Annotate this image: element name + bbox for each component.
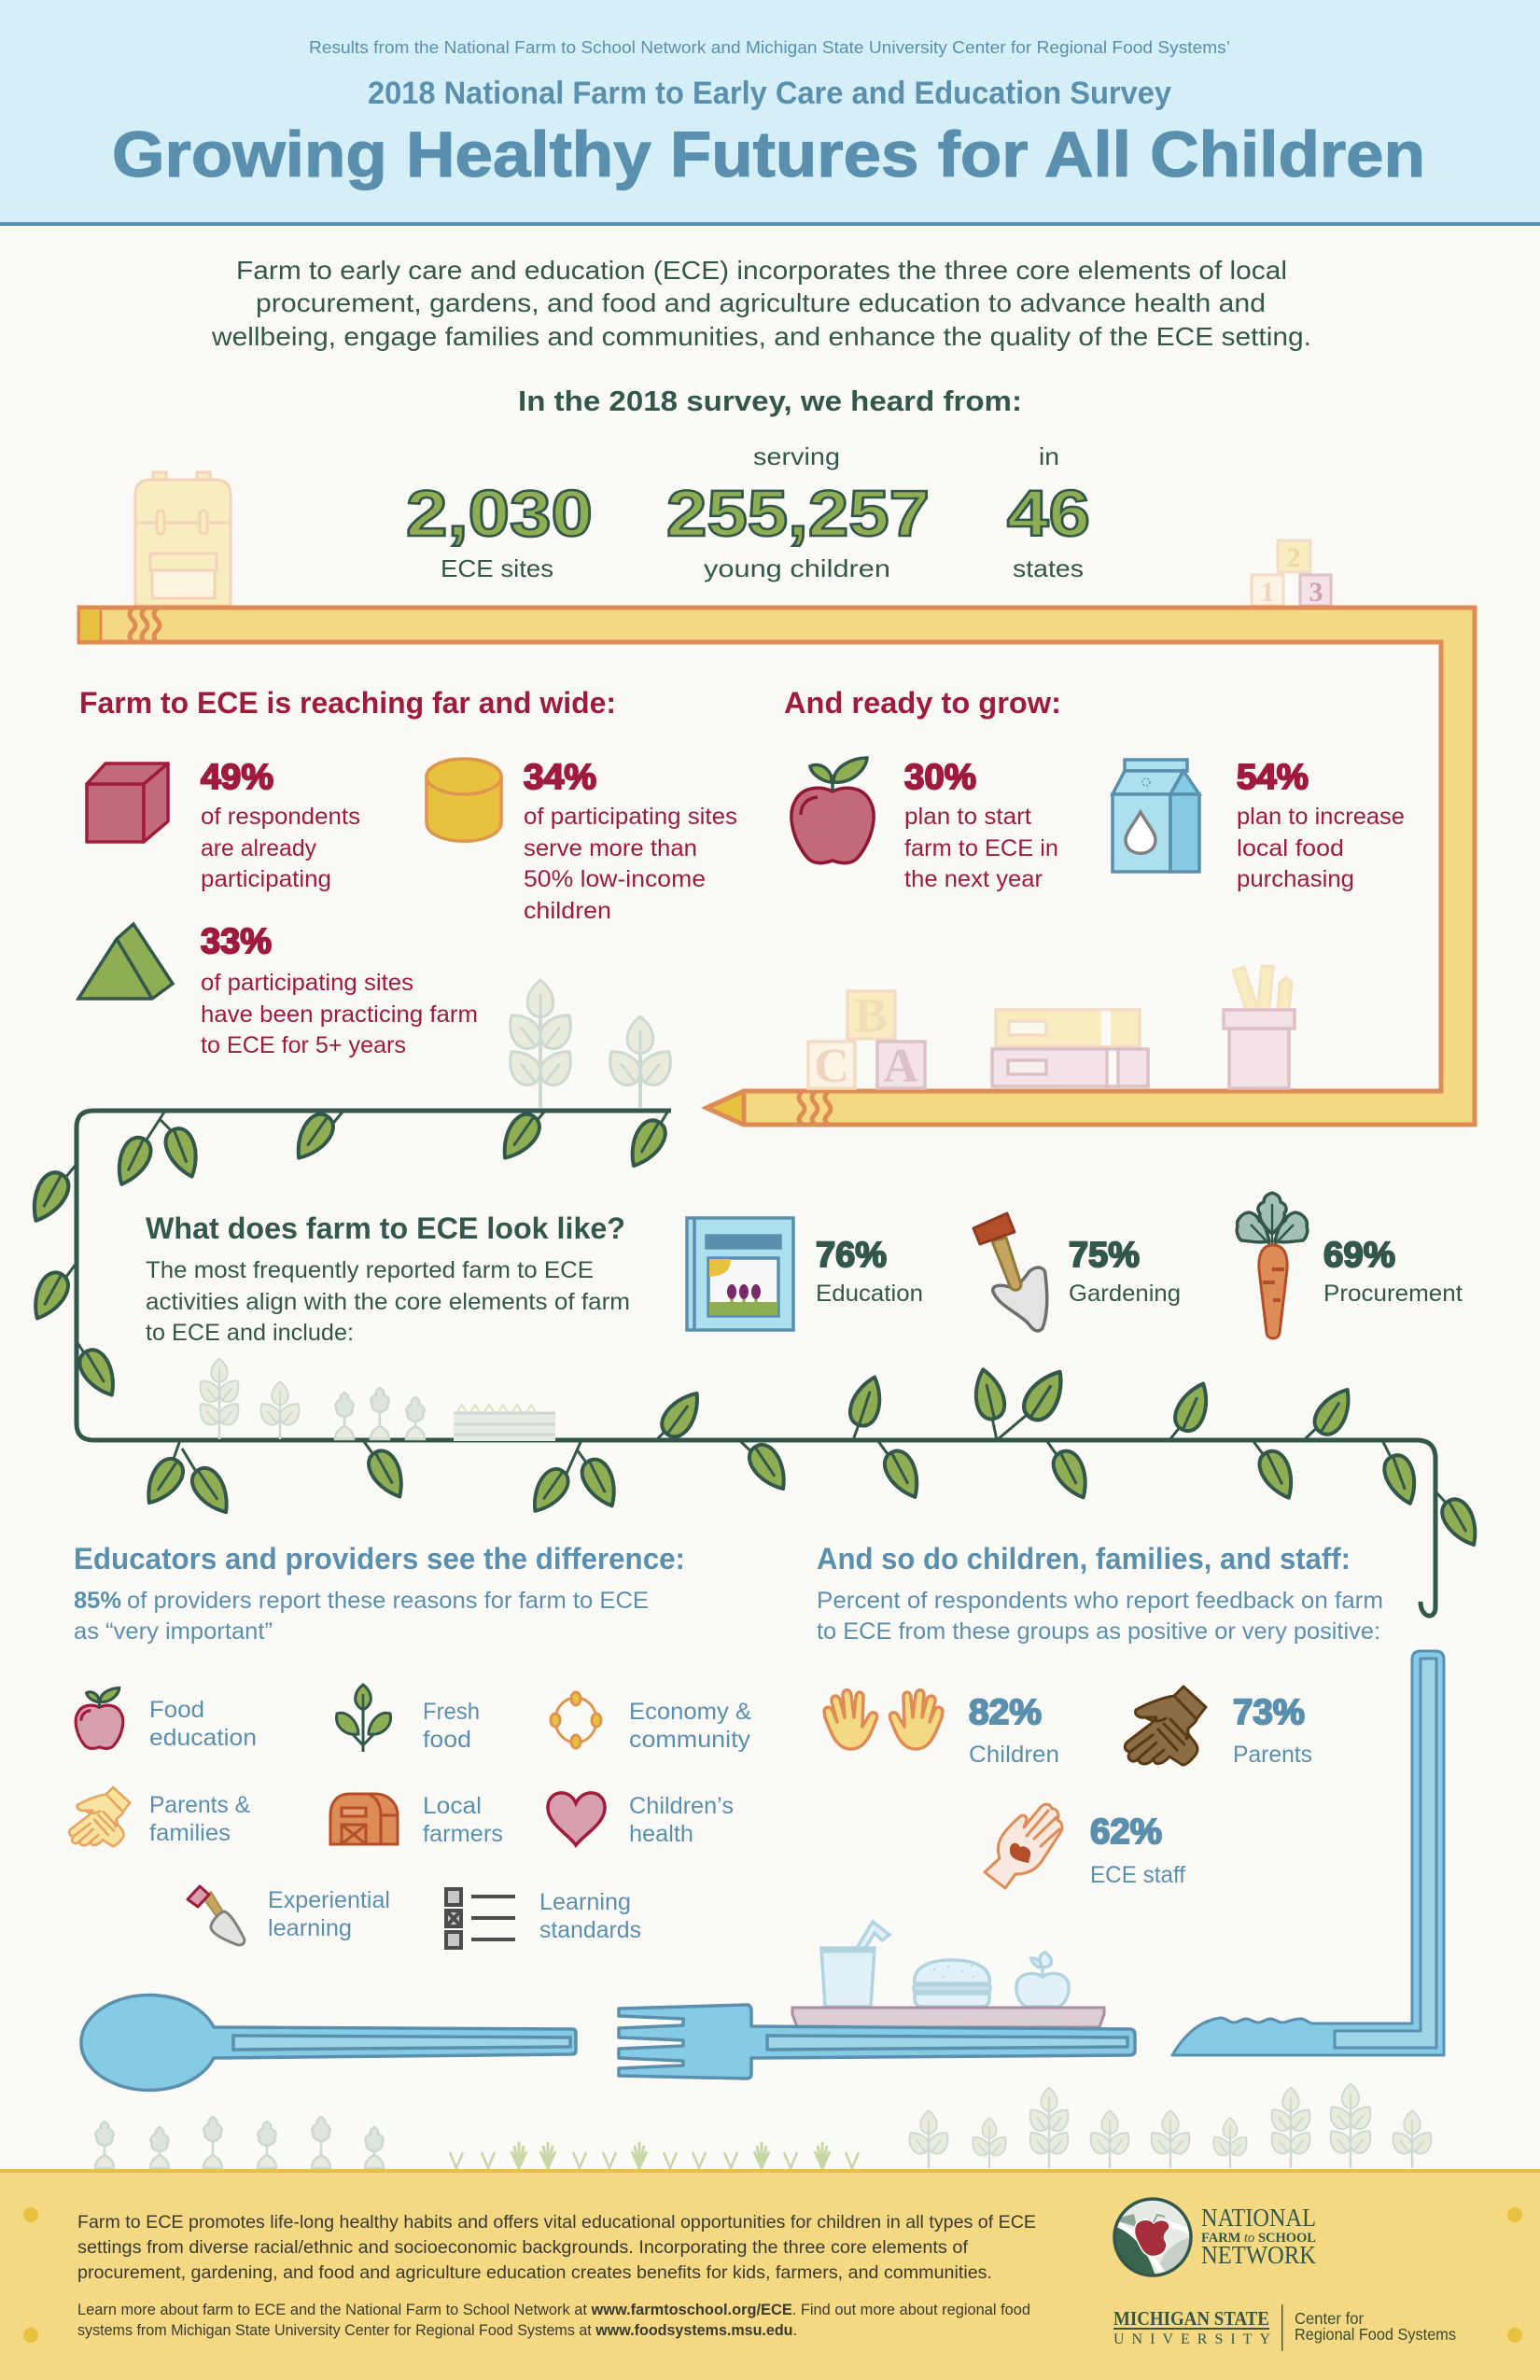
reason: children's health	[548, 1793, 734, 1847]
icon: clasped hands	[69, 1787, 130, 1846]
reason: children's health: Children’s	[629, 1793, 734, 1819]
faded classroom objects on pencil	[808, 966, 1295, 1093]
reason: food education: education	[149, 1725, 257, 1751]
vine stems	[58, 1111, 1456, 1514]
logo: National Farm to School Network: NATIONAL	[1201, 2204, 1316, 2232]
item: 49 percent: 49%	[201, 758, 273, 797]
item: 34 percent: children	[524, 898, 611, 924]
icon: spoon	[81, 1995, 576, 2091]
footer summary text: procurement, gardening, and food and agriculture education creates benefits for kids, farmers, and communities.	[77, 2263, 992, 2283]
faded garden row	[95, 2084, 1437, 2168]
icon: number blocks: 2	[1286, 542, 1301, 573]
reason: local farmers: Local	[423, 1793, 482, 1819]
arrow: pencil path	[79, 608, 1475, 1125]
icon: letter blocks	[808, 989, 925, 1093]
feedback: ECE staff: ECE staff	[1090, 1862, 1185, 1888]
icon: brown clasped hands	[1125, 1687, 1206, 1765]
stat: ECE sites: ECE sites	[441, 554, 553, 582]
description	[817, 1588, 1383, 1645]
reason: local farmers: farmers	[423, 1821, 503, 1847]
description	[146, 1257, 630, 1346]
description: to ECE from these groups as positive or very positive:	[817, 1618, 1380, 1645]
icon: fork	[619, 2005, 1135, 2079]
reason: parents and families: families	[149, 1820, 231, 1846]
stat: states: in	[1039, 442, 1059, 470]
reason: learning standards	[446, 1889, 641, 1948]
footer panel	[0, 2169, 1540, 2380]
feedback: children	[824, 1690, 1059, 1768]
intro paragraph: Farm to early care and education (ECE) incorporates the three core elements of local	[236, 256, 1287, 285]
icon: knife	[1172, 1651, 1444, 2055]
icon: community ring	[551, 1692, 601, 1748]
stat: states	[1007, 442, 1090, 582]
icon: letter blocks: C	[814, 1040, 849, 1093]
header kicker: Results from the National Farm to School Network and Michigan State University Center for Regional Food Systems’	[309, 37, 1230, 57]
logo: Michigan State University: Center for	[1295, 2309, 1364, 2328]
item: 49 percent: participating	[201, 866, 331, 892]
icon: stacked books	[992, 1010, 1148, 1086]
logo: National Farm to School Network	[1111, 2195, 1316, 2282]
vine with leaves	[23, 1109, 1486, 1616]
reason: parents and families	[69, 1787, 250, 1846]
faded plants on upper vine	[501, 980, 679, 1108]
icon: small apple	[76, 1688, 123, 1748]
icon: trowel	[973, 1213, 1047, 1331]
description: of providers report these reasons for farm to ECE	[127, 1588, 649, 1614]
footer summary text	[77, 2213, 1036, 2283]
stat: young children: 255,257	[666, 477, 930, 550]
reason: fresh food	[337, 1685, 480, 1753]
reason: learning standards: Learning	[539, 1889, 631, 1915]
feedback: children: Children	[969, 1742, 1059, 1768]
icon: milk carton	[1113, 760, 1199, 872]
footer summary text: Farm to ECE promotes life-long healthy habits and offers vital educational opportunities for children in all types of ECE	[77, 2213, 1036, 2233]
stat: young children: serving	[753, 442, 840, 470]
leafy plants	[903, 2084, 1437, 2168]
panel: children families and staff	[817, 1542, 1383, 1888]
item: 54 percent	[1113, 758, 1405, 892]
icon: green tent	[78, 924, 173, 999]
description: The most frequently reported farm to ECE	[146, 1257, 594, 1283]
icon: hand with heart	[985, 1804, 1062, 1888]
panel: what does farm to ECE look like	[146, 1193, 1463, 1346]
description: activities align with the core elements of farm	[146, 1289, 630, 1315]
item: 34 percent: of participating sites	[524, 804, 737, 830]
item: 34 percent: serve more than	[524, 835, 697, 861]
icon: raised hands	[824, 1690, 943, 1749]
item: 34 percent	[427, 758, 737, 924]
item: 30 percent: 30%	[904, 758, 976, 797]
footer links text	[77, 2302, 1030, 2339]
footer links text: Learn more about farm to ECE and the National Farm to School Network at www.farmtoschool.org/ECE. Find out more about regional food	[77, 2302, 1030, 2318]
header banner	[0, 0, 1540, 226]
reason: parents and families: Parents &	[149, 1792, 250, 1818]
logo: Michigan State University: UNIVERSITY	[1113, 2331, 1270, 2347]
item: education: Education	[816, 1281, 923, 1307]
footer summary text: settings from diverse racial/ethnic and socioeconomic backgrounds. Incorporating the three core elements of	[77, 2238, 969, 2258]
item: 54 percent: purchasing	[1237, 866, 1354, 892]
item: 33 percent: have been practicing farm	[201, 1001, 478, 1028]
reason: food education: Food	[149, 1697, 204, 1723]
reason: learning standards: standards	[539, 1917, 641, 1943]
icon: barn	[330, 1794, 398, 1844]
intro paragraph: wellbeing, engage families and communities, and enhance the quality of the ECE setting.	[211, 322, 1311, 351]
item: 54 percent: 54%	[1237, 758, 1309, 797]
logo: Michigan State University	[1113, 2304, 1456, 2351]
item: gardening: Gardening	[1069, 1281, 1181, 1307]
feedback: ECE staff: 62%	[1090, 1813, 1162, 1852]
panel: educators and providers	[69, 1542, 751, 1948]
item: education: 76%	[816, 1236, 887, 1275]
icon: faded apple	[1016, 1953, 1069, 2007]
reason: economy and community	[551, 1692, 751, 1753]
reason: local farmers	[330, 1793, 503, 1847]
panel: reaching far and wide	[78, 686, 737, 1058]
stat: ECE sites: 2,030	[406, 477, 593, 550]
item: gardening: 75%	[1069, 1236, 1140, 1275]
icon: carrot	[1237, 1193, 1308, 1338]
logo: Michigan State University: Regional Food Systems	[1295, 2325, 1456, 2344]
stat: young children	[666, 442, 930, 582]
item: procurement: 69%	[1323, 1236, 1395, 1275]
survey heading: In the 2018 survey, we heard from:	[518, 385, 1022, 417]
stat: ECE sites	[406, 477, 593, 582]
description	[74, 1588, 649, 1645]
item: procurement	[1237, 1193, 1463, 1338]
reason: fresh food: Fresh	[423, 1699, 480, 1725]
heading: Farm to ECE is reaching far and wide:	[79, 686, 616, 720]
panel: ready to grow	[784, 686, 1405, 892]
reason: economy and community: community	[629, 1727, 751, 1753]
icon: book	[687, 1218, 793, 1330]
item: 49 percent	[87, 758, 360, 892]
logo: National Farm to School Network: NETWORK	[1201, 2241, 1316, 2269]
reason: experiential learning: Experiential	[268, 1887, 390, 1913]
icon: pencil cup	[1224, 966, 1295, 1088]
item: 54 percent: local food	[1237, 835, 1344, 861]
feedback: ECE staff	[985, 1804, 1185, 1888]
footer links text: systems from Michigan State University Center for Regional Food Systems at www.foodsystems.msu.edu.	[77, 2322, 797, 2339]
item: 34 percent: 34%	[524, 758, 596, 797]
icon: glass with straw	[821, 1922, 889, 2007]
main title: Growing Healthy Futures for All Children	[112, 119, 1425, 190]
icon: sprout	[337, 1685, 390, 1752]
icon: red cube	[87, 763, 168, 842]
survey subtitle: 2018 National Farm to Early Care and Education Survey	[368, 76, 1171, 111]
reason: experiential learning: learning	[268, 1915, 352, 1941]
item: 34 percent: 50% low-income	[524, 866, 706, 892]
icon: yellow cylinder	[427, 759, 501, 841]
logo: National Farm to School Network: FARM to SCHOOL	[1201, 2231, 1316, 2246]
stat: states: states	[1013, 554, 1084, 582]
intro paragraph	[211, 256, 1311, 351]
reason: experiential learning	[188, 1886, 390, 1945]
logo: Michigan State University: MICHIGAN STATE	[1113, 2307, 1269, 2330]
reason: food education	[76, 1688, 257, 1751]
reason: children's health: health	[629, 1821, 693, 1847]
item: procurement: Procurement	[1323, 1281, 1463, 1307]
reason: economy and community: Economy &	[629, 1699, 751, 1725]
item: education	[687, 1218, 923, 1330]
icon: apple	[791, 758, 874, 863]
feedback: children: 82%	[969, 1693, 1042, 1732]
item: 33 percent: to ECE for 5+ years	[201, 1032, 406, 1058]
item: 30 percent: farm to ECE in	[904, 835, 1058, 861]
reason: fresh food: food	[423, 1727, 471, 1753]
intro paragraph: procurement, gardens, and food and agriculture education to advance health and	[256, 288, 1266, 317]
cutlery and food	[81, 1651, 1444, 2091]
grass sprouts	[450, 2142, 859, 2168]
icon: number blocks: 1	[1260, 577, 1275, 608]
item: 30 percent: plan to start	[904, 804, 1031, 830]
item: 30 percent	[791, 758, 1058, 892]
stat: states: 46	[1007, 477, 1090, 550]
icon: tray	[792, 2008, 1104, 2027]
description: Percent of respondents who report feedback on farm	[817, 1588, 1383, 1614]
stats row	[406, 442, 1090, 582]
icon: number blocks: 3	[1309, 577, 1323, 608]
icon: backpack	[135, 472, 231, 606]
description: 85%	[74, 1588, 121, 1614]
feedback: parents: Parents	[1233, 1742, 1312, 1768]
icon: small trowel	[188, 1886, 245, 1945]
icon: number blocks	[1252, 540, 1331, 608]
item: 33 percent: of participating sites	[201, 970, 413, 996]
heading: Educators and providers see the difference:	[74, 1542, 685, 1575]
feedback: parents	[1125, 1687, 1312, 1768]
feedback: parents: 73%	[1233, 1693, 1305, 1732]
icon: heart	[548, 1793, 605, 1845]
heading: And ready to grow:	[784, 686, 1061, 720]
heading: What does farm to ECE look like?	[146, 1211, 625, 1245]
icon: burger	[914, 1960, 990, 2007]
item: 30 percent: the next year	[904, 866, 1043, 892]
heading: And so do children, families, and staff:	[817, 1542, 1351, 1575]
item: gardening	[973, 1213, 1181, 1331]
faded plants on lower vine	[194, 1359, 555, 1441]
radish plants	[95, 2117, 384, 2168]
icon: checklist	[446, 1889, 515, 1948]
description: to ECE and include:	[146, 1320, 354, 1346]
item: 33 percent: 33%	[201, 922, 272, 961]
leaves on the upper and left vine	[23, 1109, 671, 1402]
item: 33 percent	[78, 922, 478, 1058]
icon: letter blocks: A	[883, 1040, 918, 1093]
crate	[454, 1405, 555, 1441]
item: 54 percent: plan to increase	[1237, 804, 1405, 830]
description: as “very important”	[74, 1618, 273, 1645]
leaves below the lower vine	[138, 1439, 1486, 1551]
icon: letter blocks: B	[855, 989, 887, 1043]
leaves above the lower vine	[656, 1364, 1359, 1442]
stat: young children: young children	[704, 554, 890, 582]
item: 49 percent: of respondents	[201, 804, 360, 830]
item: 49 percent: are already	[201, 835, 316, 861]
